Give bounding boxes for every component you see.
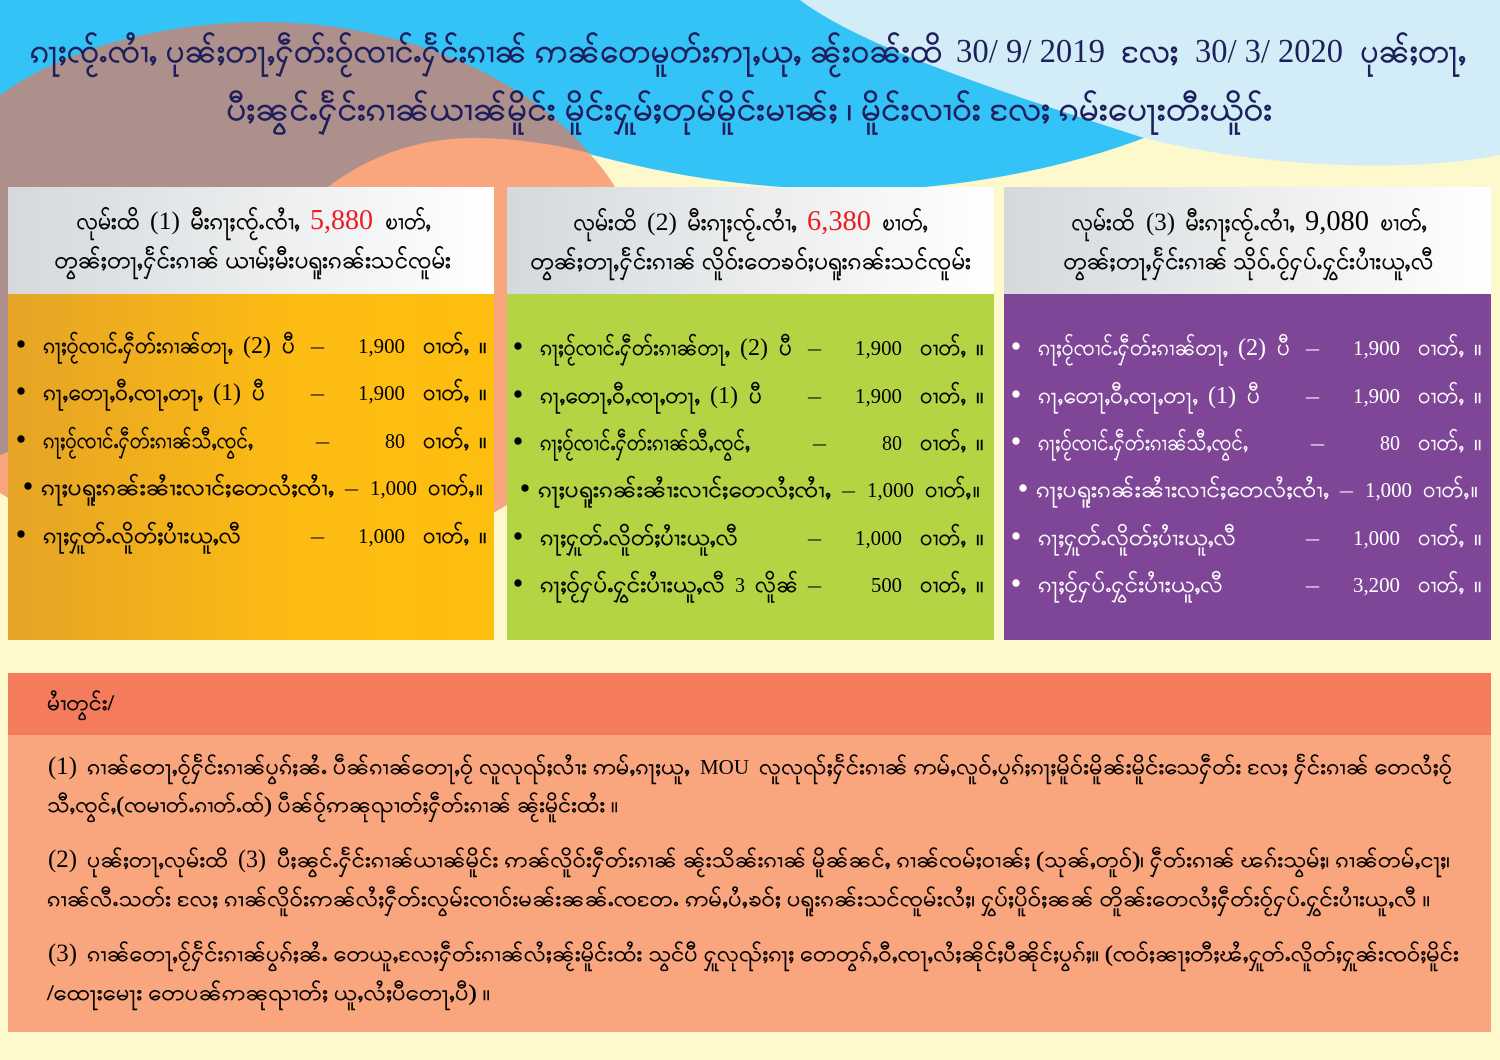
note 2 xyxy=(47,846,1450,917)
panel 1 fee list: ။ xyxy=(479,428,487,453)
panel 1 fee list: ၵႃႈပရူးၵၼ်းၼၢႆးလၢင်ႈတေလႆႈၸၢႆႇ xyxy=(41,475,334,505)
panel 1 fee list: ။ xyxy=(479,380,487,405)
panel 2 fee list: ဝၢတ်ႇ xyxy=(920,525,966,550)
panel 2 fee list: – xyxy=(807,526,822,550)
panel 2 heading: (2) xyxy=(647,209,677,236)
panel 2 heading: ၿၢတ်ႇ xyxy=(882,207,928,236)
note 2: ၵၢၼ်လီႉသတ်း လႄႈ ၵၢၼ်လိူဝ်းဢၼ်လႆႈႁဵတ်းလွမ်းၸၢဝ်းမၼ်းၼၼ်ႉၸတႄႉ ဢမ်ႇပႆႇၶဝ်ႈ ပရူးၵၼ်းသင်ၸူမ်းလႆႈ၊ ႁွပ်ႈပိူဝ်ႈၼၼ် တိူၼ်းတေလႆႈႁဵတ်းဝႂ်ႁပ်ႉႁွင်းပၢႆးယူႇလီ ။ xyxy=(47,886,1430,917)
panel 3 fee list: 1,000 xyxy=(1365,478,1412,502)
panel 3 fee list: (1) xyxy=(1208,383,1236,409)
panel 2 fee list: လိူၼ် xyxy=(755,572,798,602)
panel 1 fee list: – xyxy=(315,429,330,453)
panel 1 fee list: ။ xyxy=(476,475,483,500)
panel 1 heading: လုမ်းထိ xyxy=(76,206,139,240)
panel 1 fee list: ၵႃႈဝႂ်ၸၢင်ႉႁဵတ်းၵၢၼ်သီႇၸွင်ႇ xyxy=(43,428,253,459)
panel 1 fee list xyxy=(17,333,487,553)
notes header bar xyxy=(8,673,1491,735)
panel 1 fee list: 80 xyxy=(385,429,405,453)
panel 1 fee list: 1,900 xyxy=(358,381,405,405)
panel 3 fee list: – xyxy=(1310,431,1325,455)
panel 3 fee list: ဝၢတ်ႇ xyxy=(1418,335,1464,360)
panel 2 body background xyxy=(507,294,994,640)
panel 2 fee list: ဝၢတ်ႇ xyxy=(925,477,971,502)
title: 30/ 3/ 2020 xyxy=(1195,33,1343,70)
panel 1 heading: (1) xyxy=(150,208,180,235)
note 3: (3) xyxy=(48,940,77,967)
panel 3 heading: လုမ်းထိ xyxy=(1071,207,1134,241)
panel 3 fee list xyxy=(1012,335,1482,603)
panel 3 fee list: ဝၢတ်ႇ xyxy=(1418,572,1464,597)
panel 2 fee list: ၵႃႈဝႂ်ၸၢင်ႉႁဵတ်းၵၢၼ်တႃႇ xyxy=(540,335,730,366)
background shape: blue wave xyxy=(0,0,1150,190)
panel 3 fee list: ဝၢတ်ႇ xyxy=(1418,383,1464,408)
panel 2 fee list: – xyxy=(807,573,822,597)
panel 1 fee list: – xyxy=(310,334,325,358)
panel 2 fee list xyxy=(514,335,984,603)
panel 1 fee list: ဝၢတ်ႇ xyxy=(423,380,469,405)
panel 2 fee list: – xyxy=(841,478,856,502)
title: ပီႈၼွင်ႉႁႅင်းၵၢၼ်ယၢၼ်မိူင်း မိူင်းႁူမ်ႈတုမ်မိူင်းမၢၼ်ႈ ၊ မိူင်းလၢဝ်း လႄႈ ၵမ်းပေႃးတီးယိူဝ်း xyxy=(226,90,1272,135)
panel 3 heading: ၿၢတ်ႇ xyxy=(1380,207,1427,236)
panel 1 heading: မီးၵႃႈၸႂ်ႉၸၢႆႇ xyxy=(190,206,300,241)
note 3 xyxy=(47,940,1459,1010)
panel 3 fee list: ၵႃႈႁူတ်ႉလိူတ်ႈပၢႆးယူႇလီ xyxy=(1038,525,1236,555)
panel 2 fee list: 80 xyxy=(882,431,902,455)
panel 2 fee list: ဝၢတ်ႇ xyxy=(920,572,966,597)
note 2: ပုၼ်ႈတႃႇလုမ်းထိ xyxy=(87,847,228,877)
panel 3 heading: 9,080 xyxy=(1305,206,1369,237)
panel 3 fee list: ၵႃႇတေႃႇဝီႇၸႃႇတႃႇ xyxy=(1038,383,1198,413)
panel 3 fee list: ။ xyxy=(1474,383,1482,408)
panel 3 header background xyxy=(1004,187,1491,294)
panel 3 fee list: ဝၢတ်ႇ xyxy=(1423,477,1469,502)
panel 2 fee list: ၵႃႈႁူတ်ႉလိူတ်ႈပၢႆးယူႇလီ xyxy=(540,525,738,555)
panel 2 fee list: ပီ xyxy=(779,335,792,360)
panel 1 body background xyxy=(8,294,494,640)
panel 1 header background xyxy=(8,187,494,294)
note 2: (2) xyxy=(48,846,77,873)
panel 2 fee list: ဝၢတ်ႇ xyxy=(920,335,966,360)
panel 3 fee list: 1,000 xyxy=(1353,526,1400,550)
panel 2 fee list: (2) xyxy=(740,335,768,361)
panel 2 fee list: ။ xyxy=(976,525,984,550)
panel 1 fee list: ။ xyxy=(479,523,487,548)
panel 1 fee list: ဝၢတ်ႇ xyxy=(423,333,469,358)
title: 30/ 9/ 2019 xyxy=(956,33,1105,70)
panel 3 fee list: ၵႃႈဝႂ်ၸၢင်ႉႁဵတ်းၵၢၼ်သီႇၸွင်ႇ xyxy=(1038,430,1248,461)
title: ပုၼ်ႈတႃႇ xyxy=(1360,32,1466,77)
title: လႄႈ xyxy=(1121,34,1178,70)
panel 1 fee list: ၵႃႈဝႂ်ၸၢင်ႉႁဵတ်းၵၢၼ်တႃႇ xyxy=(43,333,233,364)
panel 2 fee list: (1) xyxy=(710,383,738,409)
note 1: သီႇၸွင်ႇ(ၸမၢတ်ႉၵၢတ်ႉထ်) ပဵၼ်ဝႂ်ဢၼုၺၢတ်ႈႁဵတ်းၵၢၼ် ၼႂ်းမိူင်းထႆး ။ xyxy=(47,792,618,823)
panel 2 fee list: ပီ xyxy=(749,383,762,408)
panel 3 body background xyxy=(1004,294,1491,640)
panel 2 fee list: ။ xyxy=(973,477,980,502)
panel 3 fee list: 1,900 xyxy=(1353,384,1400,408)
note 1: (1) xyxy=(48,753,77,780)
note 2: (3) xyxy=(238,846,266,873)
panel 1 fee list: – xyxy=(310,524,325,548)
panel: level 1 xyxy=(8,187,494,640)
panel 2 fee list: ၵႃႈဝႂ်ၸၢင်ႉႁဵတ်းၵၢၼ်သီႇၸွင်ႇ xyxy=(540,430,750,461)
panel 2 fee list: 1,900 xyxy=(855,336,902,360)
note 1: ၵၢၼ်တေႃႇဝႂ်ႁႅင်းၵၢၼ်ပွၵ်ႈၼႆႉ ပဵၼ်ၵၢၼ်တေႃႇဝႂ် လူလုၺ်ႈလၢႆး ဢမ်ႇၵႃႈယူႇ xyxy=(87,754,690,785)
panel: notes xyxy=(8,673,1491,1032)
panel 1 fee list: ၵႃႇတေႃႇဝီႇၸႃႇတႃႇ xyxy=(43,380,203,410)
panel 3 fee list: – xyxy=(1305,336,1320,360)
panel 3 fee list: ။ xyxy=(1474,525,1482,550)
panel 2 fee list: ။ xyxy=(976,335,984,360)
panel 2 heading: တွၼ်ႈတႃႇႁႅင်းၵၢၼ် လိူဝ်းတေၶဝ်ႈပရူးၵၼ်းသင်ၸူမ်း xyxy=(530,246,971,280)
panel 3 fee list: ။ xyxy=(1474,430,1482,455)
panel 1 heading xyxy=(54,205,451,279)
panel 2 fee list: ။ xyxy=(976,572,984,597)
note 1 xyxy=(47,753,1452,823)
panel 1 fee list: (1) xyxy=(213,380,241,406)
note 3: /ထေႃးမေႃး တေပၼ်ဢၼုၺၢတ်ႈ ယူႇလႆႈပီတေႃႇပီ) ။ xyxy=(47,980,490,1010)
panel 1 fee list: 1,000 xyxy=(370,476,417,500)
panel 2 fee list: ။ xyxy=(976,383,984,408)
panel 3 fee list: (2) xyxy=(1238,335,1266,361)
panel 1 fee list: ။ xyxy=(479,333,487,358)
panel 3 fee list: 3,200 xyxy=(1353,573,1400,597)
panel 2 fee list: 3 xyxy=(735,573,745,597)
panel 1 fee list: 1,900 xyxy=(358,334,405,358)
panel 3 fee list: – xyxy=(1339,478,1354,502)
panel 3 fee list: ။ xyxy=(1474,572,1482,597)
panel 3 fee list: ဝၢတ်ႇ xyxy=(1418,430,1464,455)
background shape: mauve dome xyxy=(0,22,600,460)
panel 1 fee list: 1,000 xyxy=(358,524,405,548)
panel 2 fee list: 500 xyxy=(871,573,902,597)
panel 2 fee list: ၵႃႇတေႃႇဝီႇၸႃႇတႃႇ xyxy=(540,383,700,413)
panel 2 fee list: – xyxy=(807,384,822,408)
panel 3 fee list: – xyxy=(1305,384,1320,408)
panel 3 fee list: – xyxy=(1305,573,1320,597)
panel 3 heading xyxy=(1063,206,1433,281)
panel: level 2 xyxy=(507,187,994,640)
notes body background xyxy=(8,735,1491,1032)
panel 2 fee list: ဝၢတ်ႇ xyxy=(920,430,966,455)
background shape: light blue wave xyxy=(800,0,1500,166)
panel 3 fee list: ၵႃႈဝႂ်ႁပ်ႉႁွင်းပၢႆးယူႇလီ xyxy=(1038,572,1223,603)
panel 3 fee list: – xyxy=(1305,526,1320,550)
panel 2 fee list: – xyxy=(807,336,822,360)
panel 2 fee list: ၵႃႈဝႂ်ႁပ်ႉႁွင်းပၢႆးယူႇလီ xyxy=(540,572,725,603)
title: ၵႃႈၸႂ်ႉၸၢႆႇ ပုၼ်ႈတႃႇႁဵတ်းဝႂ်ၸၢင်ႉႁႅင်းၵၢၼ် ဢၼ်တေမူတ်းဢႃႇယုႇ ၼႂ်းဝၼ်းထိ xyxy=(30,32,942,77)
panel 1 heading: ၿၢတ်ႇ xyxy=(385,206,431,235)
panel 3 heading: တွၼ်ႈတႃႇႁႅင်းၵၢၼ် သိုဝ်ႉဝႂ်ႁပ်ႉႁွင်းပၢႆးယူႇလီ xyxy=(1063,246,1433,281)
panel 2 fee list: 1,000 xyxy=(855,526,902,550)
panel 1 fee list: – xyxy=(344,476,359,500)
panel 1 fee list: ပီ xyxy=(252,380,265,405)
background shape: peach circle xyxy=(0,138,615,512)
panel 3 heading: မီးၵႃႈၸႂ်ႉၸၢႆႇ xyxy=(1185,207,1295,242)
panel 3 fee list: ။ xyxy=(1471,477,1478,502)
panel 3 fee list: ၵႃႈဝႂ်ၸၢင်ႉႁဵတ်းၵၢၼ်တႃႇ xyxy=(1038,335,1228,366)
panel 3 fee list: ၵႃႈပရူးၵၼ်းၼၢႆးလၢင်ႈတေလႆႈၸၢႆႇ xyxy=(1036,477,1329,507)
panel 2 header background xyxy=(507,187,994,294)
panel 2 heading xyxy=(530,206,971,280)
panel 2 fee list: – xyxy=(812,431,827,455)
panel 3 fee list: 1,900 xyxy=(1353,336,1400,360)
panel 3 fee list: 80 xyxy=(1380,431,1400,455)
panel 1 fee list: ဝၢတ်ႇ xyxy=(428,475,474,500)
panel 1 fee list: (2) xyxy=(243,333,271,359)
panel 1 fee list: ပီ xyxy=(282,333,295,358)
note 1: MOU xyxy=(700,755,749,779)
panel 3 fee list: ပီ xyxy=(1247,383,1260,408)
note 3: ၵၢၼ်တေႃႇဝႂ်ႁႅင်းၵၢၼ်ပွၵ်ႈၼႆႉ တေယူႇလႄႈႁဵတ်းၵၢၼ်လႆႈၼႂ်းမိူင်းထႆး သွင်ပီ ႁူလုၺ်ႈၵႃႈ တေတွၵ်ႇဝီႇၸႃႇလႆႈၼိုင်ႈပီၼိုင်ႈပွၵ်ႈ။ (ၸဝ်ႈၼႃႈတီႈၽႆႇႁူတ်ႉလိူတ်ႈႁူၼ်းၸဝ်ႈမိူင်း xyxy=(87,941,1459,972)
panel 2 heading: မီးၵႃႈၸႂ်ႉၸၢႆႇ xyxy=(687,207,797,242)
panel 1 fee list: ၵႃႈႁူတ်ႉလိူတ်ႈပၢႆးယူႇလီ xyxy=(43,523,241,553)
panel 2 heading: လုမ်းထိ xyxy=(573,207,636,241)
panel 2 fee list: ၵႃႈပရူးၵၼ်းၼၢႆးလၢင်ႈတေလႆႈၸၢႆႇ xyxy=(538,477,831,507)
note 2: ပီႈၼွင်ႉႁႅင်းၵၢၼ်ယၢၼ်မိူင်း ဢၼ်လိူဝ်းႁဵတ်းၵၢၼ် ၼႂ်းသိၼ်းၵၢၼ် မိူၼ်ၼင်ႇ ၵၢၼ်ၸမ်ႈဝၢၼ်ႈ (သုၼ်ႇတူဝ်)၊ ႁဵတ်းၵၢၼ် ၽၵ်းသွမ်ႈ၊ ၵၢၼ်တမ်ႇငႃႈ၊ xyxy=(277,847,1450,878)
panel 1 fee list: ဝၢတ်ႇ xyxy=(423,523,469,548)
panel 1 fee list: – xyxy=(310,381,325,405)
panel 3 heading: (3) xyxy=(1146,209,1175,236)
panel 2 fee list: ။ xyxy=(976,430,984,455)
title xyxy=(30,32,1466,135)
panel 2 fee list: 1,000 xyxy=(867,478,914,502)
panel 1 heading: 5,880 xyxy=(310,205,373,236)
panel 2 fee list: 1,900 xyxy=(855,384,902,408)
note 1: လူလုၺ်ႈႁႅင်းၵၢၼ် ဢမ်ႇလူဝ်ႇပွၵ်ႈၵႃႈမိူဝ်းမိူၼ်းမိူင်းသေႁဵတ်း လႄႈ ႁႅင်းၵၢၼ် တေလႆႈဝႂ် xyxy=(759,754,1452,785)
panel 1 fee list: ဝၢတ်ႇ xyxy=(423,428,469,453)
panel 3 fee list: ။ xyxy=(1474,335,1482,360)
panel: level 3 xyxy=(1004,187,1491,640)
panel 3 fee list: ပီ xyxy=(1277,335,1290,360)
panel 3 fee list: ဝၢတ်ႇ xyxy=(1418,525,1464,550)
panel 2 fee list: ဝၢတ်ႇ xyxy=(920,383,966,408)
notes heading: မၢႆတွင်း/ xyxy=(47,690,115,720)
panel 2 heading: 6,380 xyxy=(807,206,871,237)
panel 1 heading: တွၼ်ႈတႃႇႁႅင်းၵၢၼ် ယၢမ်ႈမီးပရူးၵၼ်းသင်ၸူမ်း xyxy=(54,245,451,279)
